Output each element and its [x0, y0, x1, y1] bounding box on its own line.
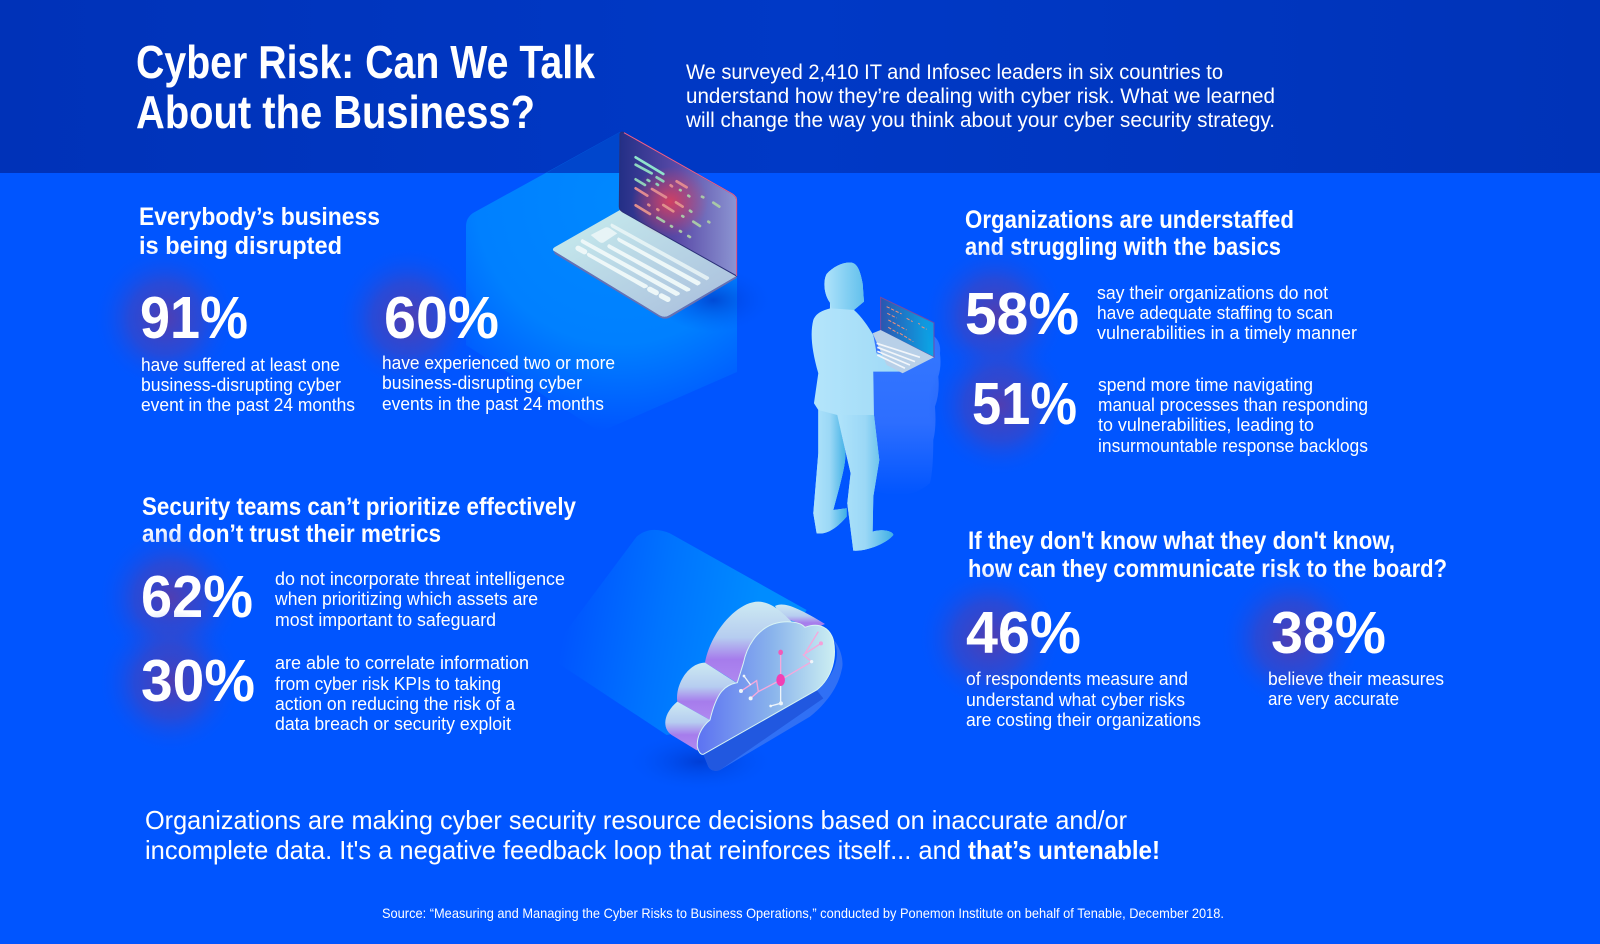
- stat 91%: have suffered at least one: [141, 355, 340, 375]
- hexagon light panel behind laptop: [466, 132, 737, 432]
- stat 46%: are costing their organizations: [966, 710, 1201, 730]
- conclusion text: incomplete data. It's a negative feedback loop that reinforces itself... and: [145, 835, 961, 865]
- heading: If they don't know what they don't know,: [968, 527, 1395, 555]
- heading: [142, 493, 576, 548]
- icon: laptop: [553, 132, 770, 332]
- stat 58%: 58%: [965, 281, 1079, 347]
- source line: Source: “Measuring and Managing the Cyber Risks to Business Operations,” conducted by Ponemon Institute on behalf of Tenable, December 2018.: [382, 905, 1224, 921]
- stat 51%: [928, 333, 1368, 477]
- stat 51%: manual processes than responding: [1098, 395, 1368, 415]
- stat 60%: have experienced two or more: [382, 353, 615, 373]
- heading: and don’t trust their metrics: [142, 520, 441, 548]
- stat 91%: [93, 246, 355, 415]
- stat 62%: [98, 526, 565, 670]
- stat 30%: [98, 610, 529, 754]
- stat 30%: from cyber risk KPIs to taking: [275, 674, 501, 694]
- intro text: understand how they’re dealing with cyber risk. What we learned: [686, 85, 1275, 108]
- stat 51%: to vulnerabilities, leading to: [1098, 415, 1314, 435]
- server stack behind person: [873, 333, 941, 495]
- heading: Everybody’s business: [139, 203, 380, 231]
- stat 62%: do not incorporate threat intelligence: [275, 569, 565, 589]
- stat 46%: understand what cyber risks: [966, 690, 1185, 710]
- stat 51%: spend more time navigating: [1098, 375, 1313, 395]
- stat 51%: 51%: [972, 371, 1077, 437]
- icon: person with laptop and stack: [812, 263, 941, 551]
- heading: [965, 206, 1294, 261]
- conclusion text: Organizations are making cyber security resource decisions based on inaccurate and/or: [145, 805, 1127, 835]
- stat 46%: 46%: [966, 600, 1081, 666]
- panel: everybody's business: [93, 203, 615, 415]
- conclusion text: that’s untenable!: [968, 835, 1160, 865]
- heading: [968, 527, 1447, 583]
- stat 58%: [923, 243, 1357, 387]
- stat 62%: most important to safeguard: [275, 610, 496, 630]
- person silhouette: [812, 263, 907, 551]
- stat 38%: believe their measures: [1268, 669, 1444, 689]
- stat 51%: insurmountable response backlogs: [1098, 436, 1368, 456]
- light beam: [552, 530, 807, 735]
- stat 46%: [918, 566, 1201, 730]
- icon: cloud with circuit: [552, 530, 843, 790]
- offset shadow layer: [703, 640, 843, 771]
- stat 30%: action on reducing the risk of a: [275, 694, 516, 714]
- heading: is being disrupted: [139, 232, 342, 260]
- stat 38%: 38%: [1271, 600, 1386, 666]
- cloud side lobes: [775, 605, 825, 632]
- circuit lines: [742, 632, 821, 706]
- intro text: We surveyed 2,410 IT and Infosec leaders in six countries to: [686, 61, 1223, 84]
- stat 38%: are very accurate: [1268, 689, 1399, 709]
- stat 60%: business-disrupting cyber: [382, 373, 582, 393]
- stat 38%: [1220, 566, 1444, 710]
- title: [136, 36, 595, 138]
- title: Cyber Risk: Can We Talk: [136, 36, 595, 88]
- header band: [0, 0, 1600, 173]
- stat 91%: business-disrupting cyber: [141, 375, 341, 395]
- heading: Security teams can’t prioritize effectively: [142, 493, 576, 521]
- heading: and struggling with the basics: [965, 233, 1281, 261]
- stat 91%: 91%: [140, 285, 248, 351]
- panel: security teams: [98, 493, 576, 754]
- stat 60%: 60%: [384, 285, 499, 351]
- stat 91%: event in the past 24 months: [141, 395, 355, 415]
- stat 58%: vulnerabilities in a timely manner: [1097, 323, 1357, 343]
- panel: understaffed: [923, 206, 1368, 477]
- stat 30%: 30%: [141, 648, 255, 714]
- stat 62%: 62%: [141, 564, 253, 630]
- intro text: will change the way you think about your cyber security strategy.: [685, 109, 1275, 132]
- cloud front face: [697, 622, 834, 754]
- small laptop: [873, 297, 934, 373]
- title: About the Business?: [136, 86, 535, 138]
- stat 62%: when prioritizing which assets are: [274, 589, 538, 609]
- conclusion text: [145, 805, 1160, 865]
- stat 30%: are able to correlate information: [275, 653, 529, 673]
- intro text: [685, 61, 1275, 132]
- heading: Organizations are understaffed: [965, 206, 1294, 234]
- stat 58%: say their organizations do not: [1097, 283, 1328, 303]
- panel: communicate risk: [918, 527, 1447, 730]
- heading: [139, 203, 380, 260]
- stat 30%: data breach or security exploit: [275, 714, 511, 734]
- stat 46%: of respondents measure and: [966, 669, 1188, 689]
- stat 58%: have adequate staffing to scan: [1097, 303, 1333, 323]
- stat 60%: [336, 246, 615, 414]
- stat 60%: events in the past 24 months: [382, 394, 604, 414]
- heading: how can they communicate risk to the board?: [968, 555, 1447, 583]
